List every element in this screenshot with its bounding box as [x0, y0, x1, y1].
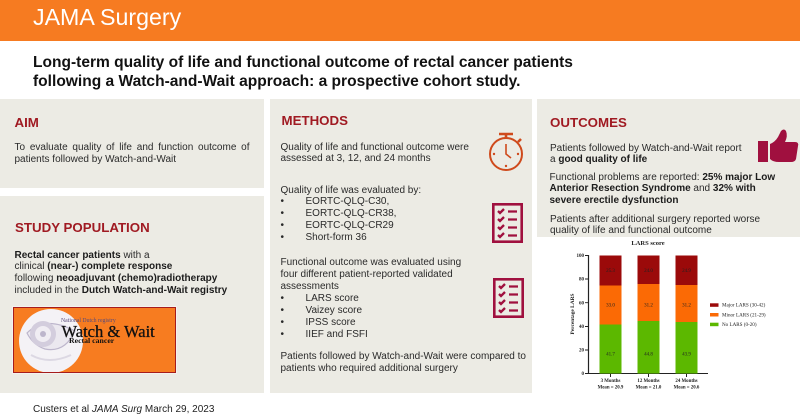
- bar value labels: 43.9: [682, 352, 691, 358]
- methods assessment text: Quality of life and functional outcome were: [280, 142, 469, 152]
- logo name: Watch & Wait: [62, 322, 155, 340]
- x axis labels: 12 Months: [637, 379, 660, 384]
- y axis tick labels: 0: [582, 372, 584, 377]
- header banner: [0, 0, 800, 41]
- bar value labels: 31.2: [644, 304, 653, 308]
- panel: outcomes: [537, 99, 800, 237]
- functional outcome list: • IIEF and FSFI: [280, 329, 368, 340]
- functional problems text: [550, 172, 776, 206]
- outcomes heading: OUTCOMES: [550, 114, 627, 130]
- functional outcome list: Functional outcome was evaluated using: [280, 257, 461, 268]
- bar value labels: 25.3: [606, 269, 615, 274]
- icon: thumbs up: [758, 130, 798, 162]
- study population heading: STUDY POPULATION: [15, 220, 150, 234]
- study population text: [14, 250, 228, 296]
- study population text: following neoadjuvant (chemo)radiotherapy: [14, 273, 217, 284]
- x axis labels: Mean = 20.6: [674, 386, 700, 390]
- additional surgery text: [550, 214, 760, 236]
- functional problems text: Anterior Resection Syndrome and 32% with: [550, 183, 756, 194]
- icon: checklist two: [493, 278, 524, 318]
- y axis tick labels: 20: [579, 348, 584, 354]
- study population text: included in the Dutch Watch-and-Wait registry: [14, 285, 227, 296]
- methods assessment text: [280, 142, 469, 164]
- bar value labels: 41.7: [606, 352, 615, 358]
- y axis tick labels: 80: [579, 278, 584, 282]
- aim text: To evaluate quality of life and function outcome of patients followed by Watch-and-Wait: [14, 142, 250, 165]
- chart title: LARS score: [631, 240, 665, 247]
- functional outcome list: assessments: [280, 281, 339, 292]
- y axis tick labels: [576, 254, 584, 377]
- functional outcome list: four different patient-reported validated: [280, 269, 453, 280]
- logo subtitle: Rectal cancer: [69, 336, 114, 344]
- icon: checklist one: [492, 203, 523, 243]
- functional outcome list: • IPSS score: [280, 317, 356, 328]
- icon: eye: [19, 309, 83, 372]
- bar value labels: [606, 269, 691, 358]
- bar value labels: 33.0: [606, 304, 615, 308]
- comparison text: Patients followed by Watch-and-Wait were compared to: [280, 351, 526, 362]
- y axis tick labels: 60: [579, 302, 584, 306]
- additional surgery text: Patients after additional surgery reported worse: [550, 214, 760, 224]
- bar value labels: 31.2: [682, 304, 691, 308]
- aim heading: AIM: [14, 114, 39, 130]
- functional problems text: Functional problems are reported: 25% major Low: [550, 172, 775, 182]
- quality of life list: • EORTC-QLQ-C30,: [280, 196, 389, 207]
- chart: LARS score stacked bars: [570, 240, 766, 390]
- comparison text: patients who required additional surgery: [280, 363, 458, 374]
- citation: Custers et al JAMA Surg March 29, 2023: [33, 404, 214, 415]
- icon: stopwatch: [489, 132, 523, 171]
- title: [33, 54, 573, 90]
- study population text: Rectal cancer patients with a: [14, 250, 150, 260]
- bar value labels: 44.8: [644, 352, 653, 358]
- bar: 12 months: [638, 256, 660, 374]
- bar value labels: 24.0: [644, 269, 653, 274]
- registry line: National Dutch registry: [61, 318, 116, 324]
- x axis labels: Mean = 21.0: [636, 386, 662, 390]
- functional outcome list: • Vaizey score: [280, 305, 362, 316]
- x axis labels: 24 Months: [675, 379, 698, 384]
- quality of life list: • EORTC-QLQ-CR38,: [280, 208, 396, 219]
- methods assessment text: assessed at 3, 12, and 24 months: [280, 153, 431, 164]
- y axis tick labels: 100: [576, 254, 584, 259]
- good quality of life text: Patients followed by Watch-and-Wait report: [550, 142, 742, 154]
- panel: methods: [270, 99, 532, 393]
- legend: Minor LARS (21-29): [722, 311, 766, 318]
- functional outcome list: • LARS score: [280, 293, 359, 304]
- methods heading: METHODS: [282, 112, 348, 128]
- bar: 3 months: [600, 256, 622, 374]
- y axis title: Percentage LARS: [570, 293, 576, 335]
- additional surgery text: quality of life and functional outcome: [550, 225, 712, 236]
- panel: study population: [0, 196, 264, 393]
- journal name: JAMA Surgery: [33, 4, 181, 30]
- x axis: [588, 374, 708, 377]
- legend: [710, 302, 766, 328]
- y axis tick labels: 40: [579, 325, 584, 330]
- legend: Major LARS (30-42): [722, 302, 766, 309]
- title: following a Watch-and-Wait approach: a prospective cohort study.: [33, 73, 520, 90]
- y axis: [585, 255, 589, 374]
- quality of life list: • EORTC-QLQ-CR29: [280, 220, 394, 231]
- functional outcome list: [280, 257, 461, 340]
- study population text: clinical (near-) complete response: [14, 261, 172, 272]
- quality of life list: Quality of life was evaluated by:: [280, 184, 421, 196]
- x axis labels: 3 Months: [601, 379, 620, 384]
- title: Long-term quality of life and functional outcome of rectal cancer patients: [33, 54, 573, 71]
- registry logo: [13, 306, 176, 372]
- quality of life list: [280, 184, 421, 243]
- x axis labels: [598, 379, 700, 390]
- comparison text: [280, 351, 526, 374]
- bar: 24 months: [676, 256, 698, 374]
- panel: aim: [0, 99, 264, 188]
- good quality of life text: [550, 142, 742, 165]
- legend: No LARS (0-20): [722, 321, 757, 328]
- x axis labels: Mean = 20.9: [598, 386, 624, 390]
- good quality of life text: a good quality of life: [550, 154, 647, 165]
- functional problems text: severe erectile dysfunction: [550, 195, 678, 206]
- bar value labels: 24.9: [682, 269, 691, 274]
- quality of life list: • Short-form 36: [280, 232, 367, 243]
